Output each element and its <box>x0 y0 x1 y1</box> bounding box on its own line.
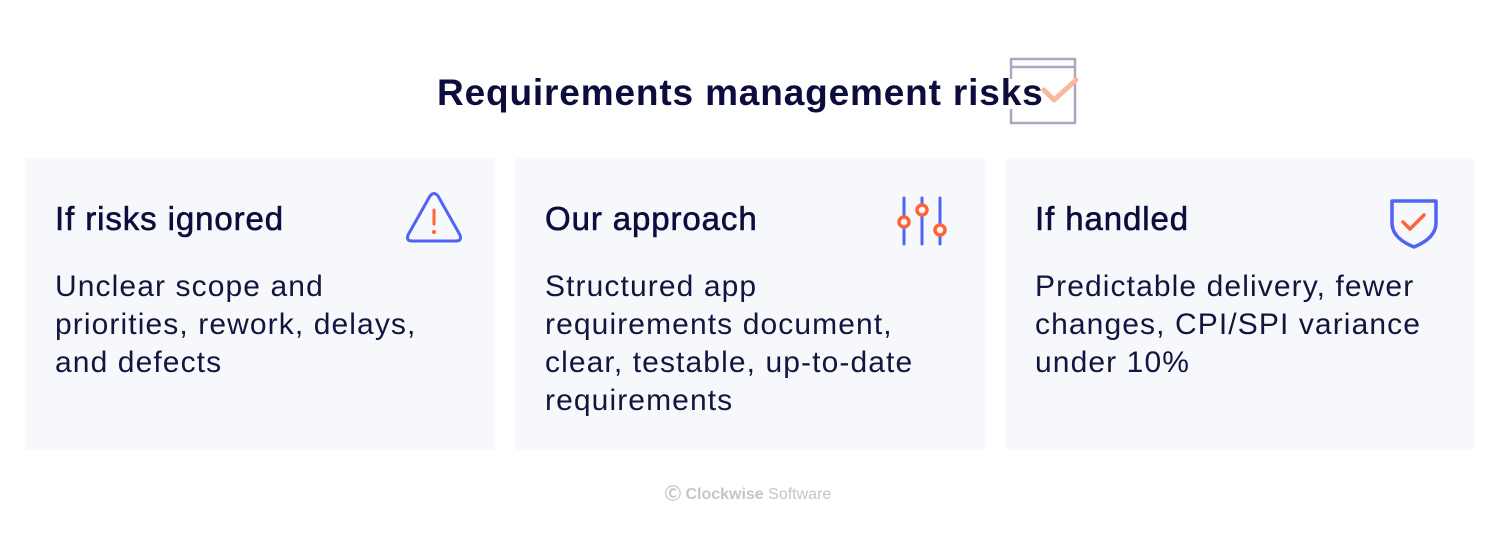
body text: under 10% <box>1035 346 1190 379</box>
body text: Unclear scope and <box>55 270 324 303</box>
body text: and defects <box>55 346 222 379</box>
title: Requirements management risks <box>437 72 1044 113</box>
heading: If risks ignored <box>55 200 284 237</box>
body text: clear, testable, up-to-date <box>545 346 913 379</box>
body text: Predictable delivery, fewer <box>1035 270 1414 303</box>
icon: warning <box>406 192 462 242</box>
body text: priorities, rework, delays, <box>55 308 416 341</box>
icon: shield check <box>1390 199 1438 249</box>
body text: requirements <box>545 384 733 417</box>
logo: Ⓒ Clockwise Software <box>665 486 831 503</box>
body text: changes, CPI/SPI variance <box>1035 308 1421 341</box>
body text <box>55 270 416 379</box>
body text <box>545 270 913 417</box>
body text: requirements document, <box>545 308 893 341</box>
body text: Structured app <box>545 270 757 303</box>
icon: title checklist <box>1010 58 1078 124</box>
icon: sliders <box>897 196 947 246</box>
heading: If handled <box>1035 200 1189 237</box>
heading: Our approach <box>545 200 758 237</box>
panel: our approach <box>515 158 985 450</box>
panel: if risks ignored <box>25 158 495 450</box>
body text <box>1035 270 1421 379</box>
panel: if handled <box>1005 158 1475 450</box>
